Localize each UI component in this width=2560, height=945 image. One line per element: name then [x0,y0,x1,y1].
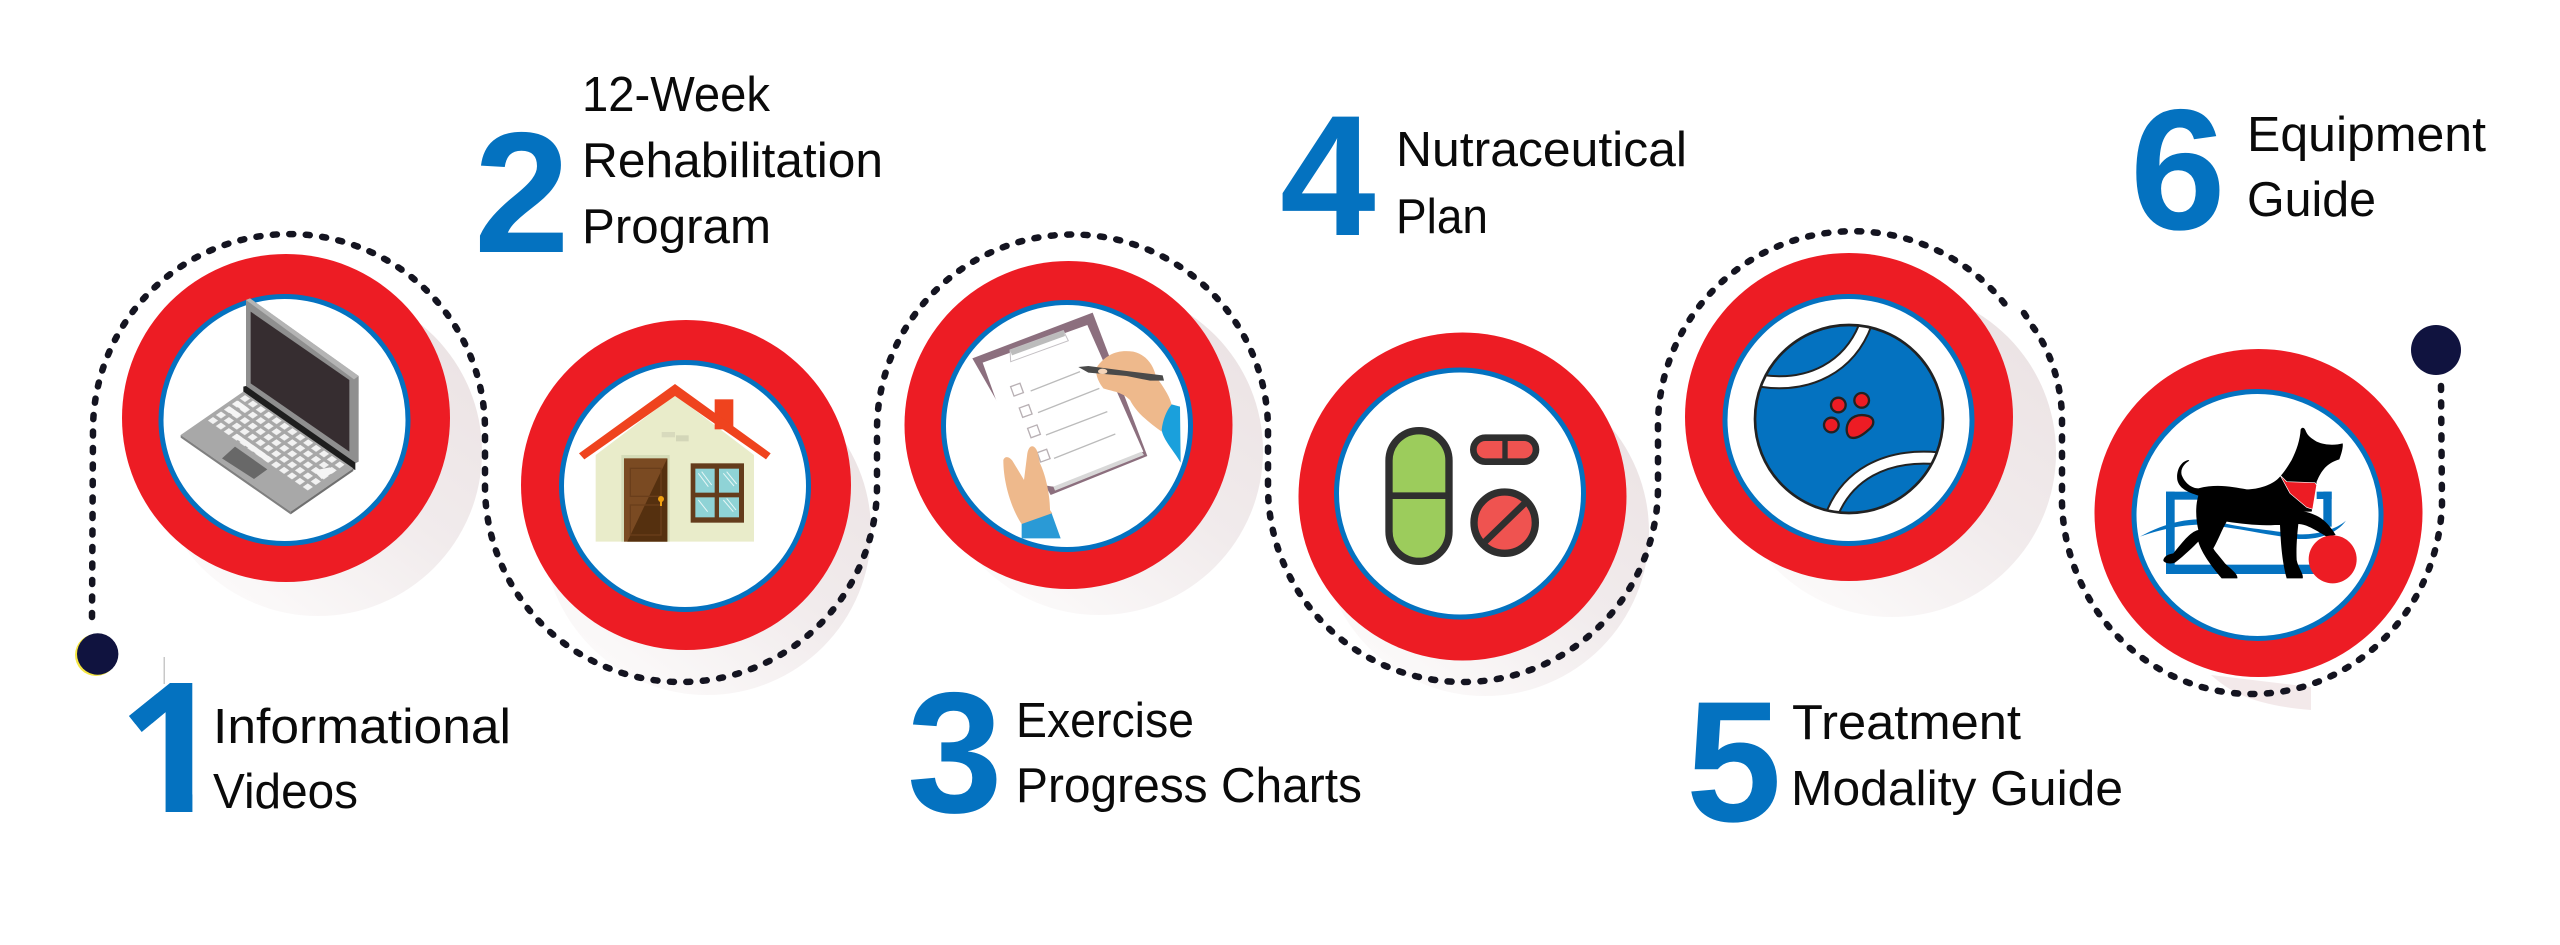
step 5 label: Treatment [1792,696,2021,750]
icon: laptop [181,298,359,514]
step 3 label: Exercise [1016,694,1194,748]
ring 2 [521,320,851,650]
step 2 label: Program [582,200,771,254]
step 2 label [582,68,883,254]
step 5 label: Modality Guide [1791,762,2123,816]
ring 1 [122,254,450,582]
step 6 number: 6 [2130,74,2226,266]
step 6 label [2247,108,2486,227]
ring 4 [1298,332,1626,660]
end dot [2411,325,2461,375]
icon: pills [1389,431,1536,561]
icon: tennis ball with paw [1755,323,1943,515]
step 4 label: Nutraceutical [1396,123,1687,177]
ring 3 [904,261,1232,589]
ring 5 [1685,253,2013,581]
step 4 number: 4 [1280,80,1376,272]
step 6 label: Guide [2247,173,2376,227]
step 3 label [1016,694,1362,813]
circle shadows [154,287,2311,710]
icon: dog with ball [2140,428,2357,583]
icon: clipboard and hands [972,313,1181,538]
step 2 label: Rehabilitation [582,134,883,188]
step 1 label [213,700,511,819]
step 6 label: Equipment [2247,108,2486,162]
start dot [75,633,118,676]
step 4 label [1396,123,1687,244]
step 4 label: Plan [1396,190,1488,244]
step 1 number [129,683,192,812]
step 2 label: 12-Week [582,68,770,122]
step 5 label [1791,696,2123,816]
faint tick above number 1 [164,657,165,684]
step 3 number: 3 [907,657,1003,849]
step 1 label: Informational [213,700,511,754]
dashed connector path [92,231,2442,694]
step 2 number: 2 [474,97,570,289]
step 3 label: Progress Charts [1016,759,1362,813]
step 1 label: Videos [213,765,358,819]
ring 6 [2094,349,2422,677]
icon: house [579,384,771,542]
step 5 number: 5 [1686,666,1782,858]
step 1 number: 1 [112,657,208,849]
